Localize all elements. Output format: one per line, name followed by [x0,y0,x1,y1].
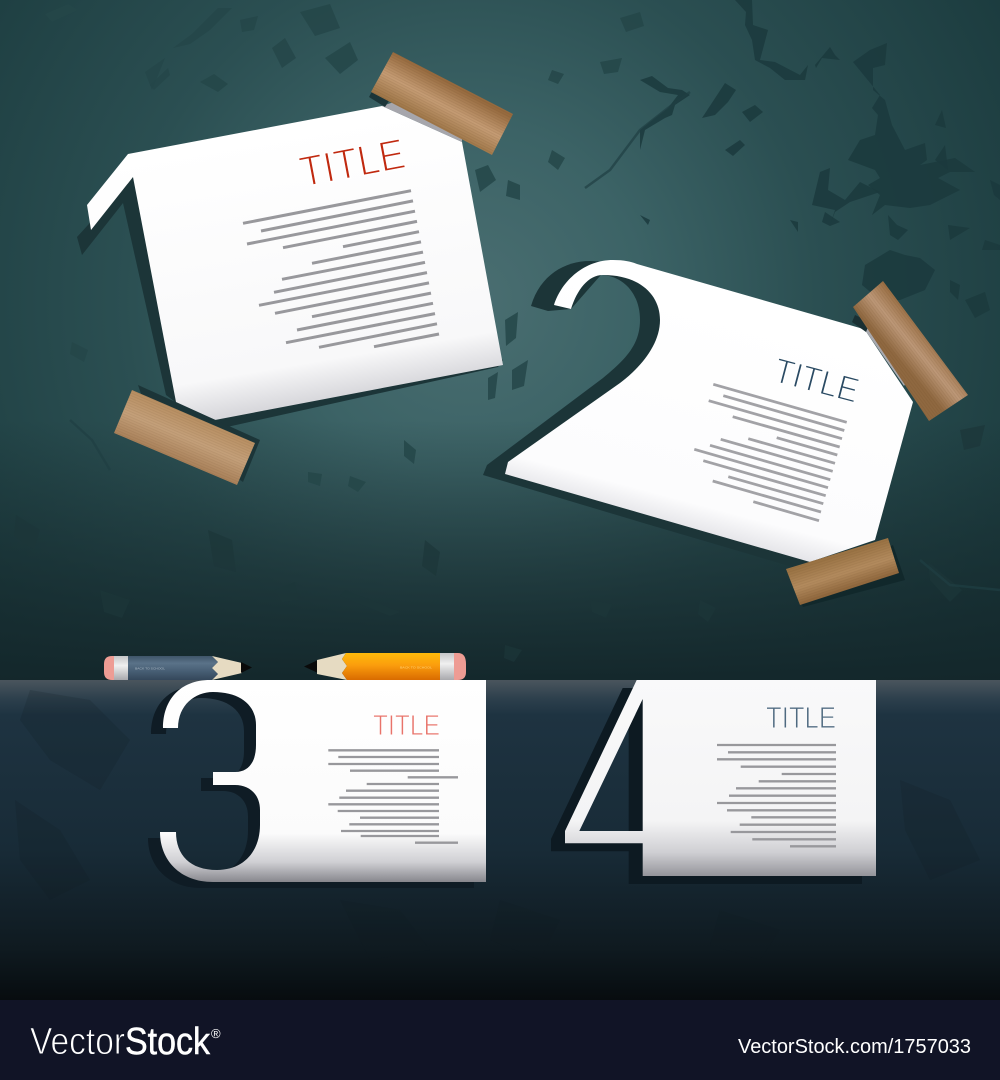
footer logo: Vector [30,1021,125,1063]
card 2 tape shade [865,326,909,386]
background: wall flecks [45,4,644,492]
card 2 shadow [531,261,612,311]
card 4 title: TITLE [766,700,836,735]
footer bar [0,1000,1000,1080]
card 1 top tape [369,52,513,155]
background: faint lower flecks [14,425,985,662]
card 4 shadow [551,688,862,884]
card 2 [483,260,968,607]
background: large dark blotches upper right [640,0,1000,318]
card 1 title: TITLE [296,130,409,197]
card 1 text lines [243,191,439,347]
card 1 bottom tape [114,385,260,485]
shelf band [0,680,1000,1000]
footer logo: Stock [125,1021,211,1063]
background: cracks in the wall [70,92,1000,590]
pencil label: BACK TO SCHOOL [135,666,165,670]
card 3 [148,680,486,888]
card 1 tape shade [176,100,462,423]
pencil: blue [104,656,252,680]
card 1 shadow [77,177,503,427]
background: dark teal wall [0,0,1000,680]
footer image id: VectorStock.com/1757033 [738,1036,971,1058]
card 2 right tape [852,281,968,421]
footer logo [30,1021,221,1063]
card 2 paper with numeral 2 [505,260,913,562]
footer logo: ® [211,1026,221,1041]
card 4 [551,680,876,884]
card 2 title: TITLE [770,351,863,411]
card 2 text lines [694,384,847,521]
pencil: orange [304,653,466,680]
pencil label: BACK TO SCHOOL [400,666,432,670]
card 3 paper with numeral 3 [160,680,486,882]
card 2 bottom tape [786,538,905,607]
shelf band texture [15,690,980,960]
card 1 [77,52,513,485]
card 3 shadow [148,686,474,888]
card 4 text lines [717,745,836,846]
card 3 title: TITLE [373,710,440,742]
card 3 text lines [328,750,458,843]
card 4 paper with numeral 4 [565,680,876,876]
card 1 paper with numeral 1 [87,106,503,420]
